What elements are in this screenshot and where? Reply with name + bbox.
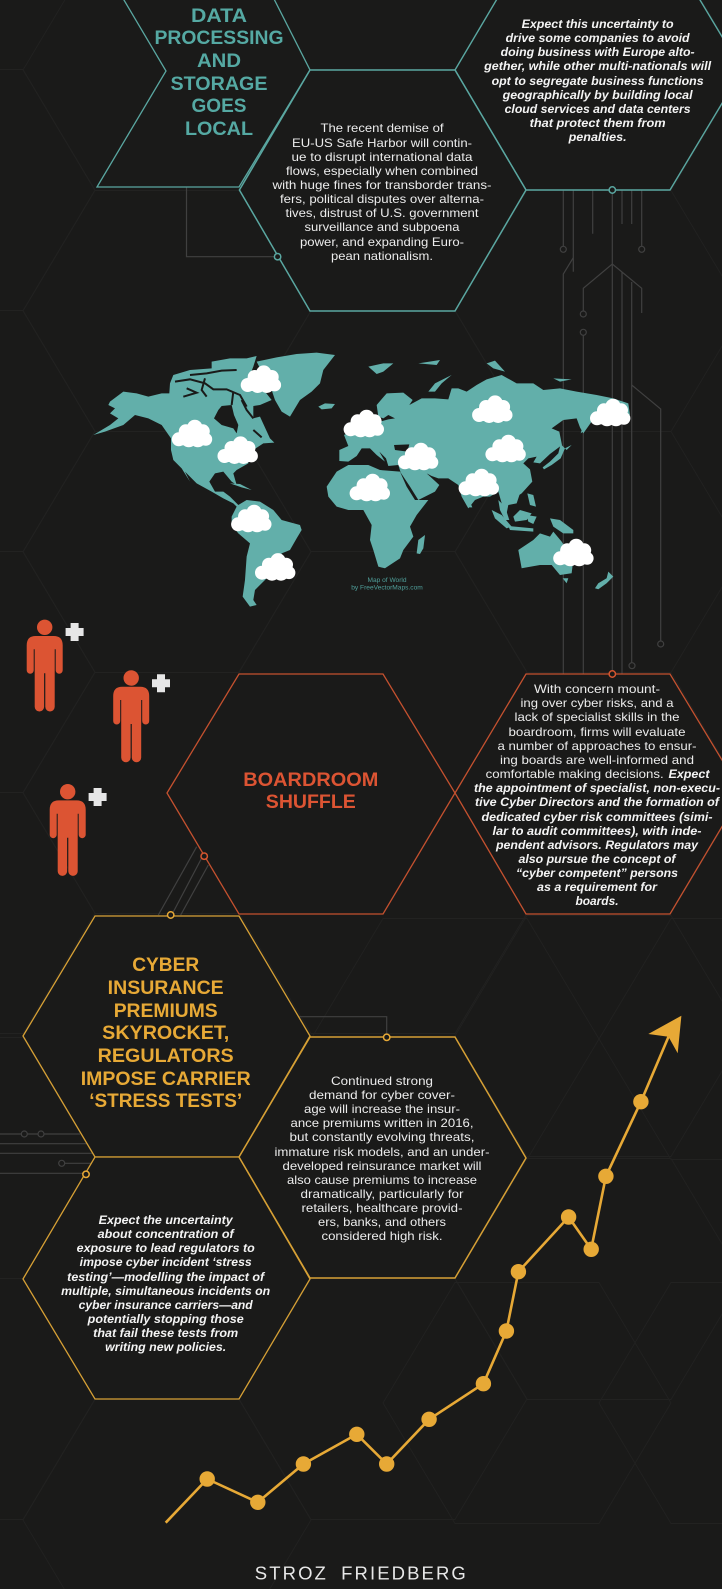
panel: expect regulators <box>23 1157 310 1399</box>
icon: cloud Greenland <box>241 365 281 393</box>
teal connector nodes <box>274 187 616 260</box>
text block: boardroom: lar to audit committees), with inde- <box>492 824 702 838</box>
text block: stress testing: multiple, simultaneous incidents on <box>61 1284 270 1298</box>
icon: person with plus 3 <box>50 784 107 876</box>
icon: cloud Australia <box>553 539 594 566</box>
text block: safe harbor: power, and expanding Euro- <box>300 235 464 249</box>
text block: boardroom: also pursue the concept of <box>518 852 677 866</box>
world map <box>93 353 630 607</box>
orange connector nodes <box>201 671 616 859</box>
text block: safe harbor: surveillance and subpoena <box>304 220 460 234</box>
title: data processing and storage goes local <box>154 5 284 140</box>
title: cyber insurance premiums: SKYROCKET, <box>102 1022 229 1044</box>
text block: continued demand: Continued strong <box>331 1074 433 1088</box>
text block: boardroom: lack of specialist skills in the <box>514 710 680 724</box>
map: Americas <box>93 353 335 607</box>
text block: safe harbor: pean nationalism. <box>331 249 433 263</box>
icon: cloud southern South America <box>255 553 295 581</box>
title: data processing and storage goes local: PROCESSING <box>154 27 284 49</box>
text block: boardroom: boards. <box>576 894 618 908</box>
text block: boardroom: pendent advisors. Regulators may <box>495 838 699 852</box>
text block: safe harbor <box>271 121 492 263</box>
icon: person with plus 2 <box>113 670 170 762</box>
text block: boardroom: ing boards are well-informed and <box>500 753 694 767</box>
icon: cloud eastern North America <box>218 436 258 464</box>
text block: boardroom: boardroom, firms will evaluate <box>508 725 686 739</box>
text block: stress testing: potentially stopping those <box>87 1312 244 1326</box>
text block: continued demand: but constantly evolving threats, <box>290 1130 474 1144</box>
icon: cloud Europe <box>344 410 384 437</box>
title: data processing and storage goes local: DATA <box>191 5 247 27</box>
text block: stress testing: Expect the uncertainty <box>99 1213 234 1227</box>
icon: cloud China <box>485 435 526 462</box>
panel: data processing heading <box>97 0 310 187</box>
text block: expect uncertainty: cloud services and data centers <box>505 102 691 116</box>
text block: continued demand <box>274 1074 490 1243</box>
text block: expect uncertainty: opt to segregate business functions <box>492 74 704 88</box>
text block: expect uncertainty <box>483 17 712 144</box>
text block: expect uncertainty: that protect them from <box>530 116 666 130</box>
text block: stress testing: that fail these tests from <box>93 1326 238 1340</box>
text block: stress testing: cyber insurance carriers—and <box>79 1298 254 1312</box>
line chart with arrow <box>166 1016 681 1523</box>
text block: stress testing: about concentration of <box>98 1227 235 1241</box>
text block: boardroom <box>474 682 720 908</box>
text block: continued demand: developed reinsurance market will <box>282 1159 482 1173</box>
icon: cloud western North America <box>172 420 212 447</box>
text block: stress testing: exposure to lead regulators to <box>77 1241 255 1255</box>
title: cyber insurance premiums: PREMIUMS <box>114 1000 218 1022</box>
text block: continued demand: ance premiums written in 2016, <box>290 1116 474 1130</box>
panel: continued demand <box>239 1037 526 1278</box>
panel: boardroom text <box>455 674 722 914</box>
text block: continued demand: immature risk models, and an under- <box>274 1145 490 1159</box>
text block: stress testing: impose cyber incident ‘stress <box>80 1255 252 1269</box>
title: cyber insurance premiums: REGULATORS <box>98 1045 234 1067</box>
icon: cloud Russia <box>472 395 512 423</box>
title: data processing and storage goes local: GOES <box>192 95 246 117</box>
text block: continued demand: dramatically, particularly for <box>300 1187 464 1201</box>
icon: cloud northern South America <box>231 505 272 532</box>
text block: boardroom: as a requirement for <box>537 880 658 894</box>
text block: expect uncertainty: penalties. <box>568 130 627 144</box>
text block: safe harbor: ue to disrupt international data <box>292 150 473 164</box>
icon: cloud Middle East <box>398 443 438 470</box>
text block: expect uncertainty: geographically by building local <box>502 88 693 102</box>
text block: continued demand: also cause premiums to increase <box>287 1173 477 1187</box>
text block: expect uncertainty: Expect this uncertainty to <box>522 17 674 31</box>
map credit: Map of World <box>367 577 407 584</box>
title: data processing and storage goes local: LOCAL <box>185 118 253 140</box>
panel: boardroom shuffle heading <box>167 674 455 914</box>
text block: boardroom: With concern mount- <box>534 682 660 696</box>
title: cyber insurance premiums: ‘STRESS TESTS’ <box>89 1090 242 1112</box>
title: cyber insurance premiums <box>81 954 251 1112</box>
text block: stress testing: testing’—modelling the impact of <box>67 1270 265 1284</box>
title: cyber insurance premiums: INSURANCE <box>108 977 224 999</box>
text block: boardroom: the appointment of specialist, non-execu- <box>474 781 720 795</box>
text block: boardroom: Expect <box>668 767 711 781</box>
logo: Stroz Friedberg: STROZ FRIEDBERG <box>255 1562 466 1584</box>
text block: expect uncertainty: drive some companies to avoid <box>506 31 690 45</box>
text block: safe harbor: with huge fines for transborder trans- <box>271 178 492 192</box>
text block: continued demand: ers, banks, and others <box>318 1215 446 1229</box>
text block: boardroom: a number of approaches to ensur- <box>498 739 696 753</box>
text block: safe harbor: flows, especially when combined <box>286 164 478 178</box>
title: boardroom shuffle <box>243 769 378 813</box>
map credit <box>351 577 423 592</box>
chart data points <box>200 1094 649 1510</box>
text block: safe harbor: fers, political disputes over alterna- <box>280 192 484 206</box>
arrow head <box>648 1016 681 1053</box>
text block: continued demand: retailers, healthcare provid- <box>302 1201 462 1215</box>
title: data processing and storage goes local: AND <box>197 50 241 72</box>
title: boardroom shuffle: SHUFFLE <box>266 791 356 813</box>
icon: cloud Kamchatka <box>590 399 630 426</box>
icon: person with plus 1 <box>27 620 84 712</box>
title: cyber insurance premiums: IMPOSE CARRIER <box>81 1068 251 1090</box>
panel: cyber insurance heading <box>23 916 310 1157</box>
circuit traces <box>0 187 664 1173</box>
icon: cloud Africa <box>350 474 390 501</box>
title: cyber insurance premiums: CYBER <box>132 954 199 976</box>
text block: safe harbor: The recent demise of <box>320 121 444 135</box>
text block: safe harbor: EU-US Safe Harbor will contin- <box>292 136 472 150</box>
text block: safe harbor: tives, distrust of U.S. government <box>286 206 479 220</box>
text block: boardroom: ing over cyber risks, and a <box>520 696 674 710</box>
title: data processing and storage goes local: STORAGE <box>170 73 268 95</box>
text block: continued demand: age will increase the insur- <box>304 1102 460 1116</box>
text block: boardroom: dedicated cyber risk committees (simi- <box>482 810 713 824</box>
text block: stress testing: writing new policies. <box>105 1340 226 1354</box>
icon: cloud India <box>459 469 499 496</box>
map: Eurasia, Africa, Oceania <box>327 360 630 589</box>
yellow connector nodes <box>83 912 390 1178</box>
title: boardroom shuffle: BOARDROOM <box>243 769 378 791</box>
text block: boardroom: tive Cyber Directors and the formation of <box>475 795 720 809</box>
text block: expect uncertainty: doing business with Europe alto- <box>501 45 695 59</box>
panel: expect uncertainty <box>455 0 722 190</box>
map credit: by FreeVectorMaps.com <box>351 584 423 592</box>
text block: stress testing <box>61 1213 270 1354</box>
text block: boardroom: comfortable making decisions. <box>486 767 664 781</box>
panel: safe harbor <box>239 70 526 311</box>
text block: continued demand: considered high risk. <box>322 1229 442 1243</box>
text block: continued demand: demand for cyber cover- <box>309 1088 455 1102</box>
text block: expect uncertainty: gether, while other multi-nationals will <box>483 59 712 73</box>
text block: boardroom: “cyber competent” persons <box>516 866 678 880</box>
